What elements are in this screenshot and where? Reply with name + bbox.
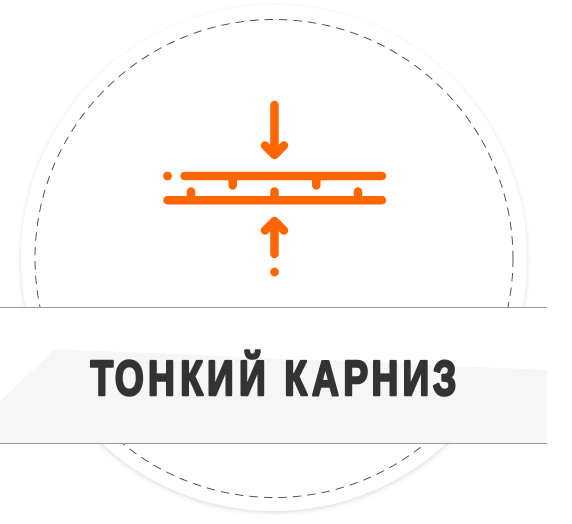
band top rule — [0, 307, 547, 308]
icon: bottom arrow — [265, 221, 284, 254]
title: ТОНКИЙ КАРНИЗ — [91, 349, 456, 406]
band grey shape — [0, 349, 547, 443]
icon: lower cornice bar — [168, 192, 382, 200]
icon: thin cornice compressed by arrows — [163, 105, 382, 276]
band bottom rule — [0, 443, 547, 444]
title band — [0, 307, 547, 444]
dashed inner ring — [35, 20, 513, 498]
icon: bottom dot — [270, 268, 279, 276]
icon: upper cornice bar — [184, 176, 382, 186]
icon: top arrow — [265, 105, 284, 155]
band white background — [0, 307, 547, 444]
icon: left dot — [163, 172, 172, 180]
